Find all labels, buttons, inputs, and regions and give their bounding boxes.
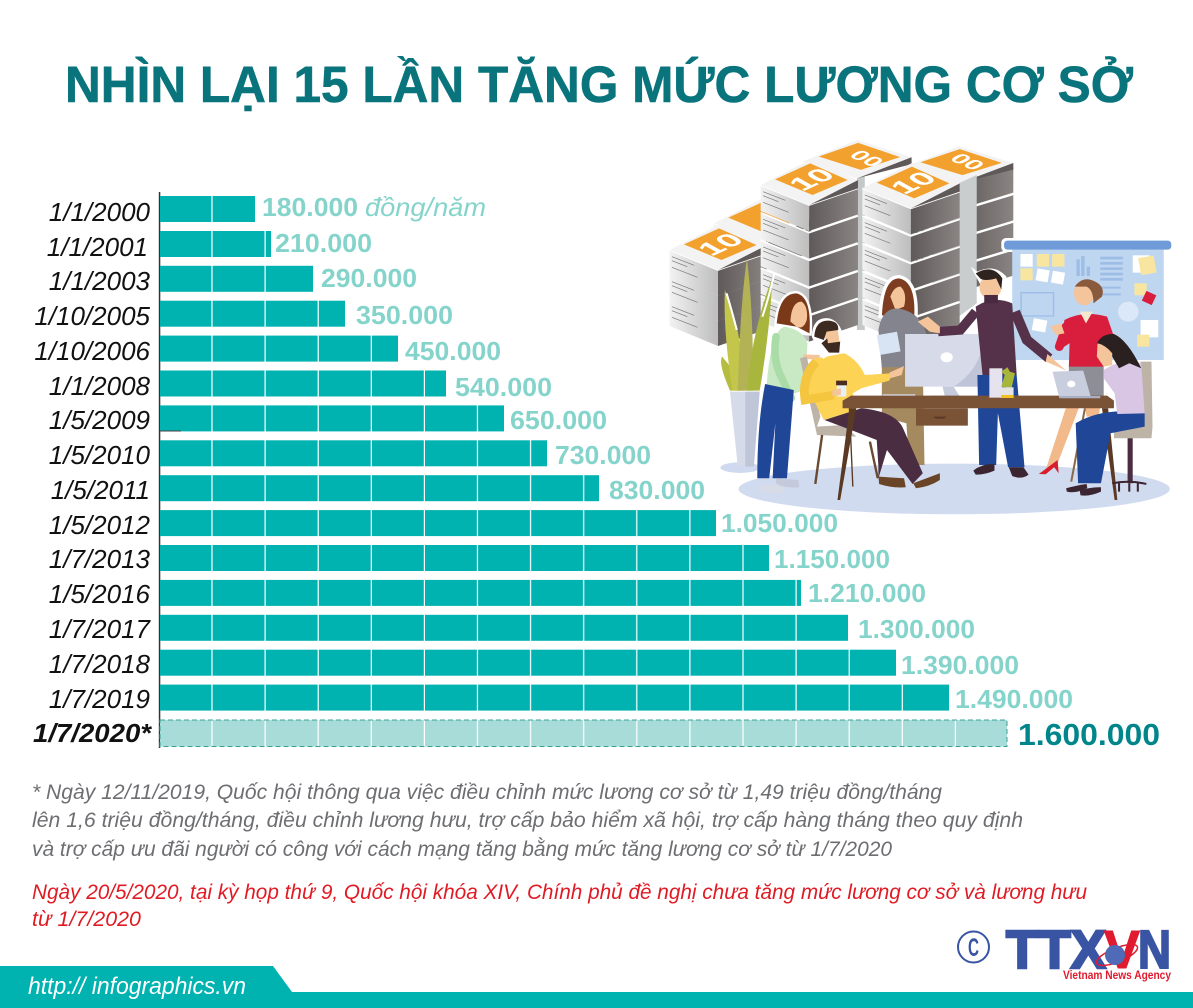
row 2001 (47, 228, 372, 262)
row 2010: 730.000 (555, 440, 651, 470)
row 2010 (49, 440, 651, 470)
row 2001: 210.000 (275, 228, 372, 258)
row 2017: 1/7/2017 (49, 614, 152, 644)
row 2012: 1.050.000 (721, 508, 838, 538)
meeting table (837, 396, 1117, 500)
footnote in grey: lên 1,6 triệu đồng/tháng, điều chỉnh lương hưu, trợ cấp bảo hiểm xã hội, trợ cấp hàng tháng theo quy định (32, 809, 1023, 832)
person: woman in red (1039, 279, 1114, 474)
row 2001: 1/1/2001 (47, 232, 148, 262)
illustration: money stacks and office team (670, 140, 1174, 514)
money stacks: 00 (844, 147, 890, 170)
row 2018 (49, 649, 1019, 680)
logo: TTXVN: Vietnam News Agency (1063, 968, 1171, 982)
row 2020 highlighted: 1/7/2020* (33, 718, 153, 748)
row 2016: 1/5/2016 (49, 579, 151, 609)
money stacks: 10 (690, 229, 751, 260)
note in red (32, 881, 1087, 931)
footnote in grey: và trợ cấp ưu đãi người có công với cách mạng tăng bằng mức tăng lương cơ sở từ 1/7/2020 (32, 838, 892, 861)
row 2011: 1/5/2011 (51, 475, 150, 505)
money stacks (670, 140, 1013, 346)
row 2013 (49, 544, 890, 574)
row 2019: 1.490.000 (955, 684, 1073, 714)
row 2019: 1/7/2019 (49, 684, 150, 714)
footnote in grey: * Ngày 12/11/2019, Quốc hội thông qua việc điều chỉnh mức lương cơ sở từ 1,49 triệu đồng/tháng (32, 781, 942, 804)
row 2012 (49, 508, 838, 540)
row 2000 (49, 192, 486, 227)
person: woman with tablet behind (877, 277, 926, 465)
logo: TTXVN: V (1104, 920, 1140, 980)
row 2018: 1/7/2018 (49, 649, 151, 679)
axis (159, 192, 160, 748)
footer band (0, 966, 1193, 1008)
row 2016 (49, 578, 926, 609)
row 2011 (51, 475, 705, 505)
row 2006: 1/10/2006 (34, 336, 151, 366)
row 2019 (49, 684, 1073, 714)
row 2003: 1/1/2003 (49, 266, 151, 296)
logo: TTXVN (958, 920, 1171, 982)
logo: TTXVN: N (1138, 920, 1171, 980)
row 2000: 1/1/2000 (49, 197, 151, 227)
row 2006 (34, 336, 501, 366)
person: woman in green (757, 293, 820, 493)
row 2017 (49, 614, 975, 644)
planning board (1001, 238, 1174, 360)
row 2005 (34, 300, 453, 331)
plant (721, 258, 774, 467)
person: man in yellow with coffee (800, 320, 940, 488)
person: seated woman in lilac (1066, 334, 1152, 496)
row 2006: 450.000 (405, 336, 501, 366)
money stacks: 10 (883, 167, 944, 198)
footer band: http:// infographics.vn (28, 973, 246, 1000)
row 2010: 1/5/2010 (49, 440, 151, 470)
logo: TTXVN: C (968, 934, 979, 962)
row 2008: 540.000 (455, 372, 552, 402)
row 2013: 1.150.000 (774, 544, 890, 574)
money stacks: 10 (781, 164, 842, 195)
row 2003 (49, 263, 417, 296)
row 2008: 1/1/2008 (49, 371, 151, 401)
note in red: Ngày 20/5/2020, tại kỳ họp thứ 9, Quốc hội khóa XIV, Chính phủ đề nghị chưa tăng mức lương cơ sở và lương hưu (32, 881, 1087, 904)
monitor (883, 334, 984, 398)
row 2009: 1/5/2009 (49, 405, 150, 435)
title: NHÌN LẠI 15 LẦN TĂNG MỨC LƯƠNG CƠ SỞ (65, 55, 1133, 113)
row 2017: 1.300.000 (858, 614, 975, 644)
row 2009 (49, 405, 607, 435)
row 2020 highlighted: 1.600.000 (1018, 717, 1160, 752)
logo: TTXVN: TTX (1006, 920, 1106, 980)
footnote in grey (32, 781, 1023, 861)
bar chart (33, 192, 1160, 752)
row 2000: 180.000 (262, 192, 358, 222)
row 2008 (49, 370, 552, 402)
person: standing man in purple sweater (918, 267, 1066, 478)
money stacks: 00 (945, 150, 990, 173)
row 2000: đồng/năm (365, 192, 486, 222)
row 2020 highlighted (33, 717, 1160, 752)
row 2012: 1/5/2012 (49, 510, 151, 540)
note in red: từ 1/7/2020 (32, 908, 141, 931)
row 2009: 650.000 (510, 405, 607, 435)
row 2016: 1.210.000 (808, 578, 926, 608)
row 2003: 290.000 (321, 263, 417, 293)
floor shadow (720, 462, 1170, 514)
row 2013: 1/7/2013 (49, 544, 151, 574)
row 2005: 350.000 (356, 300, 453, 330)
row 2005: 1/10/2005 (34, 301, 151, 331)
row 2011: 830.000 (609, 475, 705, 505)
row 2018: 1.390.000 (901, 650, 1019, 680)
desk items (989, 367, 1100, 398)
